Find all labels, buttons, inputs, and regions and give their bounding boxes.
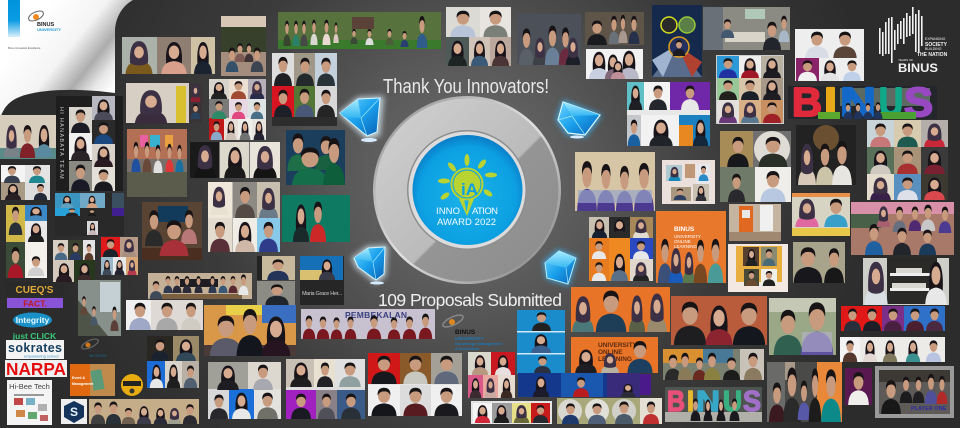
photo: orange BINUS wall team	[656, 211, 726, 283]
heading: 109 Proposals Submitted: 109 Proposals Submitted	[378, 290, 562, 310]
text: AWARD 2022: AWARD 2022	[437, 217, 496, 228]
photo: five portraits white background	[795, 29, 864, 81]
photo: six portraits	[208, 182, 280, 252]
photo: colourful BINUS sign: S	[904, 79, 933, 125]
logo: NARPA: NARPA	[6, 359, 66, 379]
icon: light bulb sun logo: iA	[461, 180, 478, 199]
photo: Pembekalan group	[301, 309, 435, 339]
photo: colourful BINUS sign: B	[792, 79, 822, 125]
tile: Maria Grace Her video	[300, 256, 344, 305]
photo: four with dark studio background	[517, 14, 581, 65]
photo: BINUS sign with four people: B	[667, 386, 685, 418]
photo: lab with white coats	[863, 258, 949, 305]
photo: six portraits mixed	[208, 362, 281, 419]
photo: couple on green wall	[282, 195, 350, 242]
photo: three people at brick wall	[671, 296, 767, 345]
panel: page curl with BINUS logo: BINUS	[37, 22, 54, 28]
photo: man with gesture	[257, 256, 295, 305]
logo: FACT.: FACT.	[23, 298, 47, 308]
photo: nine portraits right	[867, 120, 948, 200]
logo: Hi-Bee Tech: Hi-Bee Tech	[9, 382, 50, 391]
photo: portrait purple background	[845, 368, 872, 405]
photo: three women video call	[122, 37, 215, 74]
photo: six formal portraits	[368, 353, 462, 416]
tile: Maria Grace Her video: Maria Grace Her...	[302, 291, 342, 297]
panel: Hi Hanabata Team	[56, 96, 123, 191]
photo: orange BINUS wall team: BINUS	[674, 226, 695, 233]
photo: colourful BINUS sign: I	[824, 79, 837, 125]
logo: 40 years of BINUS: BINUS	[898, 61, 938, 75]
logo: 40 years of BINUS: YEARS OF	[898, 58, 913, 62]
photo: BINUS sign with four people: S	[743, 386, 761, 418]
photo: BINUS sign with four people	[665, 386, 762, 422]
logo: 40 years of BINUS: THE NATION	[917, 52, 948, 58]
photo: orange BINUS wall team: UNIVERSITY	[674, 234, 701, 239]
photo: University Online Learning: UNIVERSITY	[598, 342, 638, 349]
photo: orange BINUS wall team: ONLINE	[674, 239, 691, 244]
logo: hexagon S	[61, 399, 87, 424]
photo: group in traditional dress	[663, 349, 764, 380]
photo: video call woman	[126, 83, 202, 124]
tile: Event Management: Management	[72, 382, 94, 386]
panel: page curl with BINUS logo: UNIVERSITY	[37, 27, 61, 32]
photo: group in front of screen	[142, 202, 202, 260]
photo: BINUS sign with four people: U	[723, 386, 742, 418]
icon: bottom-left blue cube	[351, 245, 388, 284]
logo: BINUS Knowledge Management & Innovation: UNIVERSITY	[455, 336, 485, 342]
photo: men in purple batik	[575, 152, 655, 211]
photo: BINUS sign with four people: I	[687, 386, 694, 418]
photo: University Online Learning: ONLINE	[598, 349, 623, 356]
photo: five portraits	[147, 336, 199, 388]
photo: six small portraits	[53, 240, 95, 282]
photo: BINUS sign with four people: N	[696, 386, 720, 418]
text: INNOVATION: ATION	[472, 206, 498, 217]
logo: 40 years of BINUS: EXPANDING	[925, 37, 946, 41]
photo: group with banner letters	[148, 273, 252, 299]
photo: five portraits centre top	[446, 7, 511, 66]
photo: portraits orange grid	[589, 217, 653, 281]
photo: three men white background	[126, 300, 203, 330]
logo: Hi-Bee Tech	[7, 380, 52, 425]
logo: 40 years of BINUS	[879, 7, 948, 75]
photo: three black and white portraits	[190, 142, 280, 178]
photo: team in green shirts	[286, 130, 345, 185]
photo: colourful BINUS sign: N	[840, 79, 876, 125]
logo: BINUS network	[80, 337, 108, 358]
logo: sokrates: empowering school	[24, 354, 59, 358]
logo: BINUS network: BINUS	[88, 348, 102, 353]
photo: two men selfie	[793, 242, 845, 283]
logo: BINUS Knowledge Management & Innovation: & Innovation	[455, 346, 480, 351]
photo: honeycomb collage	[728, 244, 788, 292]
photo: five small portraits	[101, 237, 138, 275]
photo: team on red steps	[851, 202, 954, 255]
heading: Thank You Innovators: Thank You Innovators!	[383, 76, 549, 98]
photo: five red and blue portraits	[841, 306, 945, 331]
photo: Pembekalan group: PEMBEKALAN	[345, 310, 407, 320]
photo: QR code kiosk	[729, 204, 781, 241]
photo: University Online Learning	[571, 337, 658, 373]
photo: mixed portrait pairs	[792, 193, 850, 236]
photo: group at colourful building	[127, 129, 187, 197]
photo: small webinar boy	[640, 374, 662, 424]
icon: top-right blue cube	[556, 100, 602, 138]
photo: four portraits	[1, 165, 50, 200]
photo: five women portraits	[468, 352, 515, 398]
logo: hexagon S: S	[70, 405, 78, 419]
photo: group at green wall	[221, 16, 266, 76]
photo: twelve portraits grid	[209, 79, 266, 140]
logo: sokrates	[6, 340, 64, 359]
text: INNOVATION	[436, 206, 498, 217]
emblem: Innovation Award 2022 silver disc	[373, 96, 561, 284]
photo: webinar row	[518, 373, 640, 397]
photo: four friends white	[586, 49, 643, 79]
photo: five full-length portraits white	[840, 337, 945, 362]
logo: CUEQ'S: CUEQ'S	[16, 285, 54, 296]
logo: BINUS Knowledge Management & Innovation: BINUS	[455, 329, 476, 336]
photo: four men portraits	[720, 131, 791, 202]
text: INNOVATION: INNO	[436, 206, 460, 217]
logo: BINUS Knowledge Management & Innovation: Knowledge Management	[455, 341, 503, 346]
photo: blue webinar stack	[517, 310, 565, 374]
icon: top-left blue cube	[338, 96, 384, 142]
tile: Event Management: Event &	[72, 376, 86, 380]
icon: light bulb sun logo	[438, 154, 497, 216]
photo: four portraits vertical	[6, 205, 47, 278]
panel: page curl with BINUS logo: Binus Innovation Excellence	[8, 46, 41, 50]
photo: four portraits row	[471, 401, 552, 424]
logo: gold round badge	[121, 374, 143, 396]
photo: three men in circles	[557, 398, 640, 424]
logo: Integrity: Integrity	[16, 315, 50, 325]
logo: 40 years of BINUS: SOCIETY	[925, 42, 948, 48]
photo: collage on white	[662, 160, 715, 204]
photo: colourful BINUS sign	[788, 79, 937, 125]
logo: 40 years of BINUS: BUILDING	[925, 47, 942, 51]
logo: FACT.	[7, 298, 63, 308]
photo: Player One team: PLAYER ONE	[911, 406, 947, 412]
photo: mixed nine portraits bright	[627, 82, 710, 146]
photo: meeting room	[703, 7, 790, 50]
logo: sokrates: sokrates	[8, 341, 62, 355]
photo: team portraits grid	[272, 53, 337, 126]
logo: BINUS Knowledge Management & Innovation	[441, 313, 503, 351]
photo: dark video call grid	[55, 193, 124, 236]
logo: BINUS network: NETWORK	[89, 354, 108, 358]
photo: graduation group	[89, 399, 199, 424]
photo: outdoor team	[278, 12, 441, 49]
photo: three seated on couch	[0, 115, 57, 159]
photo: University Online Learning: LEARNING	[598, 356, 632, 363]
logo: Integrity	[13, 312, 52, 328]
panel: page curl with BINUS logo	[0, 0, 133, 116]
logo: just CLICK: just CLICK	[12, 331, 57, 341]
icon: bottom-right blue cube	[543, 249, 578, 286]
photo: two portraits with purple background	[286, 359, 365, 419]
panel: Hi Hanabata Team: HI HANABATA TEAM	[58, 107, 64, 180]
photo: selfie crowd	[585, 12, 644, 45]
photo: Player One team	[875, 366, 954, 418]
photo: stairs building	[78, 280, 121, 336]
photo: three with wooden ornament	[796, 125, 856, 185]
photo: colourful trio	[204, 305, 296, 356]
photo: navy poster with circles	[652, 5, 702, 77]
photo: orange BINUS wall team: LEARNING	[674, 244, 698, 249]
photo: orange wall trio	[571, 287, 670, 332]
photo: nine portraits centre right	[716, 55, 784, 124]
tile: Event Management	[70, 364, 115, 396]
photo: colourful BINUS sign: U	[879, 79, 903, 125]
logo: CUEQ'S	[5, 282, 64, 296]
photo: four young people close up	[767, 362, 842, 422]
photo: two men outdoors	[769, 298, 836, 355]
